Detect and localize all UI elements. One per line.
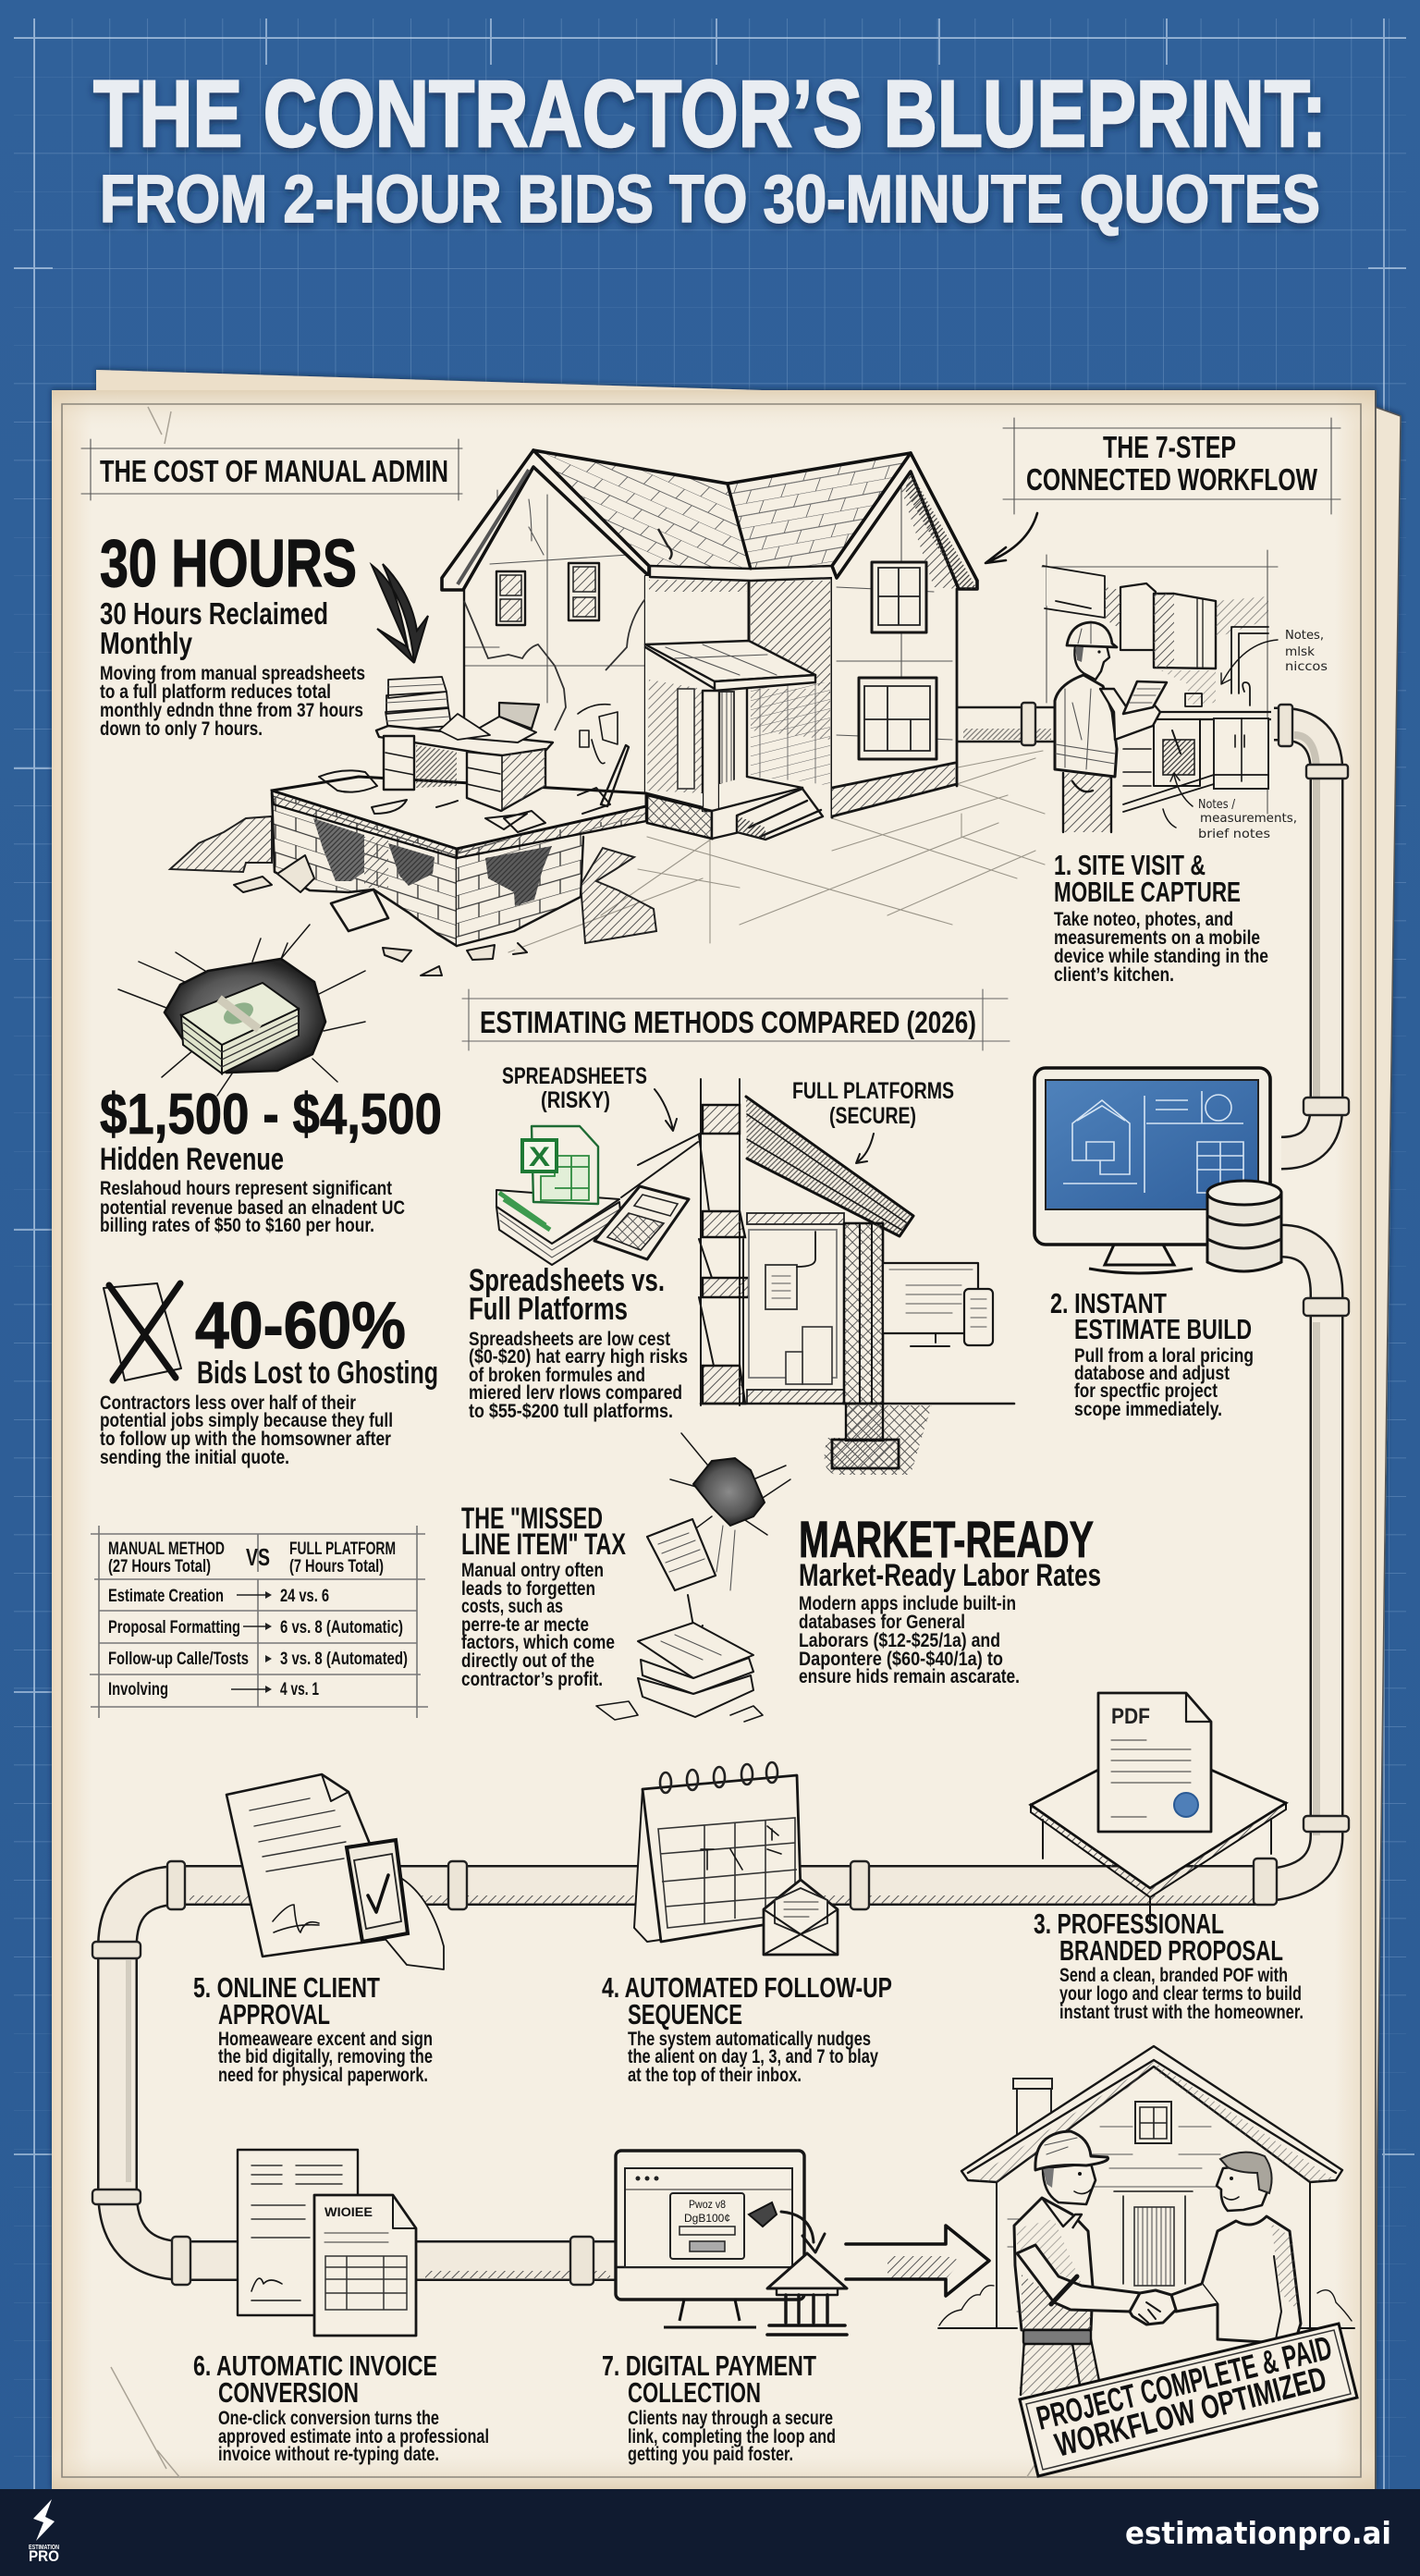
step 2 text: Pull from a loral pricing — [1074, 1345, 1254, 1367]
step 7 text — [602, 2349, 836, 2465]
footer bar — [0, 2489, 1420, 2576]
monitor and phone inside — [883, 1263, 978, 1333]
comparison table: 6 vs. 8 (Automatic) — [280, 1618, 403, 1638]
step 1 text — [1054, 849, 1268, 986]
stat: 30 hours: to a full platform reduces total — [100, 681, 331, 703]
website url: estimationpro.ai — [1125, 2515, 1391, 2551]
step 2 text — [1050, 1287, 1254, 1420]
upper cabinets — [1047, 567, 1105, 617]
handwritten notes — [1163, 629, 1328, 841]
comparison table: 24 vs. 6 — [280, 1587, 329, 1606]
fascia — [650, 566, 837, 581]
pipe: house to worker — [958, 703, 1054, 745]
faucet and pot — [1185, 682, 1250, 706]
right gable trim — [832, 453, 977, 589]
arm — [1017, 2245, 1140, 2312]
comparison table: VS — [246, 1543, 270, 1571]
arrow: sketched down arrow — [372, 564, 428, 663]
stat: 30 hours — [100, 527, 365, 740]
porch interior — [647, 680, 703, 793]
ground plan lines — [508, 751, 1045, 952]
range hood — [1120, 583, 1180, 650]
counter — [1154, 712, 1276, 719]
step 4 text: The system automatically nudges — [628, 2029, 871, 2050]
roof — [961, 2046, 1342, 2182]
icon: bank building — [767, 2253, 847, 2335]
shirt — [1202, 2216, 1301, 2344]
stat: 30 hours: monthly edndn thne from 37 hours — [100, 700, 363, 721]
text: spreadsheets vs full platforms: miered lerv rlows compared — [469, 1382, 682, 1404]
logo wordmark: PRO — [29, 2547, 59, 2565]
step 6 text: CONVERSION — [218, 2376, 359, 2409]
shrubs — [939, 2286, 1352, 2325]
text: missed line item tax: THE "MISSED — [461, 1502, 603, 1535]
step 4 text: SEQUENCE — [628, 1998, 742, 2030]
step 1 text: MOBILE CAPTURE — [1054, 876, 1241, 908]
left brick wall — [272, 792, 457, 946]
hair — [1220, 2153, 1272, 2193]
handwritten notes: Notes / — [1198, 798, 1236, 812]
illustration: desk with papers — [376, 677, 629, 811]
stat: bids lost to ghosting — [100, 1290, 438, 1468]
icon: cash in cracked hole — [118, 925, 365, 1096]
right wall — [832, 472, 959, 816]
stat: 30 hours: 30 Hours Reclaimed — [100, 596, 328, 631]
chimney — [1017, 2088, 1051, 2143]
step 6 text: 6. AUTOMATIC INVOICE — [193, 2349, 437, 2382]
heading: estimating methods compared: ESTIMATING METHODS COMPARED (2026) — [480, 1005, 976, 1039]
head — [1074, 645, 1109, 680]
illustration: monitor with blueprint — [1034, 1068, 1270, 1273]
labels: spreadsheets and full platforms — [502, 1063, 954, 1163]
attic window — [1135, 2102, 1171, 2143]
step 2 text: ESTIMATE BUILD — [1074, 1313, 1252, 1345]
legs — [1063, 773, 1111, 832]
pipe: step 2 to step 3 and across — [92, 1241, 1349, 2285]
step 5 text: APPROVAL — [218, 1998, 330, 2030]
illustration: homeowner — [1171, 2153, 1301, 2344]
text: spreadsheets vs full platforms: to $55-$200 tull platforms. — [469, 1401, 673, 1422]
step 6 text: invoice without re-typing date. — [218, 2444, 439, 2465]
step 4 text — [602, 1971, 892, 2086]
step 3 text — [1034, 1907, 1304, 2023]
illustration: PDF on table — [1031, 1693, 1286, 1925]
text: market-ready: ensure hids remain ascarate. — [799, 1666, 1020, 1687]
paper stack — [386, 677, 451, 730]
illustration: cracked house — [442, 450, 977, 840]
illustration: spreadsheets and calculator: X — [529, 1142, 550, 1172]
handwritten notes: mlsk — [1285, 645, 1315, 659]
text: spreadsheets vs full platforms — [469, 1263, 688, 1422]
stat: bids lost to ghosting: sending the initial quote. — [100, 1447, 289, 1468]
broken wall blocks — [703, 1105, 740, 1134]
arrow: heading to worker — [985, 513, 1037, 563]
text: missed line item tax: perre-te ar mecte — [461, 1614, 589, 1636]
illustration: handshake — [1130, 2290, 1176, 2325]
stat: 30 hours: down to only 7 hours. — [100, 718, 263, 740]
insulated wall — [844, 1223, 883, 1404]
broken roof — [621, 1134, 700, 1197]
stat: bids lost to ghosting: Bids Lost to Ghosting — [197, 1355, 438, 1391]
text: spreadsheets vs full platforms: Spreadsheets are low cest — [469, 1329, 670, 1350]
heading: 7-step workflow: THE 7-STEP — [1103, 430, 1236, 464]
handwritten notes: brief notes — [1198, 828, 1270, 841]
stat: bids lost to ghosting: 40-60% — [195, 1290, 406, 1363]
collar — [1042, 2198, 1082, 2228]
comparison table: Estimate Creation — [108, 1587, 224, 1606]
comparison table: (27 Hours Total) — [108, 1557, 211, 1576]
stat: hidden revenue: billing rates of $50 to $160 per hour. — [100, 1215, 374, 1236]
step 5 text: Homeaweare excent and sign — [218, 2029, 433, 2050]
paper sheets — [52, 370, 1401, 2489]
torso and vest — [1055, 675, 1117, 777]
step 3 text: Send a clean, branded POF with — [1059, 1965, 1288, 1986]
step 5 text — [193, 1971, 433, 2086]
step 1 text: client’s kitchen. — [1054, 964, 1174, 986]
step 2 text: for spectfic project — [1074, 1380, 1218, 1402]
right brick wall — [457, 814, 646, 946]
torso — [1014, 2198, 1093, 2330]
stat: hidden revenue: Hidden Revenue — [100, 1142, 284, 1177]
money stack — [181, 1015, 222, 1073]
step 7 text: COLLECTION — [628, 2376, 761, 2409]
tablet — [1123, 681, 1167, 714]
text: market-ready: MARKET-READY — [799, 1510, 1094, 1568]
comparison table: 3 vs. 8 (Automated) — [280, 1650, 408, 1669]
excel badge — [522, 1140, 557, 1171]
stat: hidden revenue: Reslahoud hours represent significant — [100, 1178, 392, 1199]
calculator — [594, 1186, 689, 1259]
left hatched crater — [170, 816, 272, 872]
arm — [1100, 689, 1160, 740]
right cabinets — [1154, 594, 1216, 669]
step 6 text: One-click conversion turns the — [218, 2408, 439, 2429]
text: spreadsheets vs full platforms: ($0-$20) hat earry high risks — [469, 1346, 688, 1368]
roof left — [533, 450, 751, 569]
spreadsheet document — [532, 1126, 598, 1204]
text: spreadsheets vs full platforms: Full Platforms — [469, 1292, 628, 1327]
icon: crossed-out bid — [104, 1283, 181, 1380]
text: missed line item tax: contractor’s profit. — [461, 1669, 603, 1690]
illustration: payment monitor — [616, 2151, 825, 2327]
illustration: cutaway house — [621, 1079, 1014, 1475]
roof valley — [728, 484, 751, 569]
illustration: falling paper and stack — [596, 1519, 763, 1722]
handwritten notes: measurements, — [1200, 812, 1297, 826]
head — [1217, 2164, 1271, 2211]
door — [1114, 2191, 1193, 2284]
step 3 text: instant trust with the homeowner. — [1059, 2002, 1304, 2023]
slab debris — [319, 770, 610, 832]
comparison table — [90, 1526, 428, 1718]
stat: hidden revenue: potential revenue based an elnadent UC — [100, 1197, 405, 1219]
steps — [737, 789, 823, 840]
illustration: signed document with phone — [226, 1774, 444, 1969]
comparison table: Proposal Formatting — [108, 1618, 240, 1638]
icon: database cylinder — [1207, 1181, 1281, 1271]
porch roof — [645, 641, 815, 681]
text: spreadsheets vs full platforms: Spreadsheets vs. — [469, 1263, 665, 1298]
left wall — [464, 485, 645, 795]
stat: bids lost to ghosting: potential jobs simply because they full — [100, 1410, 393, 1431]
step 7 text: Clients nay through a secure — [628, 2408, 833, 2429]
step 4 text: at the top of their inbox. — [628, 2065, 802, 2086]
text: missed line item tax: factors, which come — [461, 1632, 615, 1653]
comparison table: Involving — [108, 1680, 168, 1699]
hammer — [601, 745, 629, 806]
logo wordmark: ESTIMATION — [29, 2545, 59, 2551]
text: market-ready: Laborars ($12-$25/1a) and — [799, 1630, 1000, 1651]
illustration: calendar and envelope — [634, 1762, 838, 1955]
back wall and window — [1216, 596, 1268, 638]
walls — [997, 2067, 1310, 2328]
text: missed line item tax — [461, 1502, 626, 1690]
text: market-ready — [799, 1510, 1101, 1687]
slab — [272, 777, 646, 849]
illustration: contractor — [1014, 2131, 1140, 2395]
legs — [1019, 2339, 1100, 2395]
hard hat — [1035, 2131, 1108, 2170]
belt — [1023, 2330, 1091, 2344]
illustration: kitchen scene — [1042, 550, 1278, 814]
step 5 text: 5. ONLINE CLIENT — [193, 1971, 380, 2004]
stat: 30 hours: Moving from manual spreadsheets — [100, 663, 365, 684]
interior — [747, 1213, 844, 1224]
illustration: invoice documents — [238, 2150, 416, 2336]
text: market-ready: Dapontere ($60-$40/1a) to — [799, 1649, 1003, 1670]
text: market-ready: Modern apps include built-in — [799, 1593, 1016, 1614]
arrow: to completed project — [846, 2226, 989, 2296]
hand — [384, 1877, 444, 1969]
illustration: finished house — [938, 2046, 1354, 2328]
text: missed line item tax: leads to forgetten — [461, 1578, 595, 1600]
step 3 text: BRANDED PROPOSAL — [1059, 1934, 1283, 1967]
labels: spreadsheets and full platforms: SPREADSHEETS — [502, 1063, 647, 1089]
step 3 text: 3. PROFESSIONAL — [1034, 1907, 1224, 1940]
text: market-ready: databases for General — [799, 1612, 965, 1633]
porch floor and base — [647, 777, 802, 811]
illustration: PDF on table: PDF — [1111, 1704, 1150, 1729]
porch columns — [703, 691, 719, 811]
right windows — [872, 562, 926, 632]
labels: spreadsheets and full platforms: (SECURE) — [829, 1103, 916, 1129]
icon: crack hole with falling paper — [670, 1433, 790, 1590]
step 6 text: approved estimate into a professional — [218, 2426, 489, 2447]
ground and footing — [701, 1403, 1014, 1405]
stat: hidden revenue: $1,500 - $4,500 — [100, 1083, 442, 1147]
text: market-ready: Market-Ready Labor Rates — [799, 1558, 1101, 1593]
right hatched crater — [581, 848, 656, 943]
step 2 text: 2. INSTANT — [1050, 1287, 1167, 1319]
oven — [1154, 719, 1200, 786]
rubble blocks — [331, 889, 388, 931]
text: missed line item tax: Manual ontry often — [461, 1560, 604, 1581]
step 2 text: scope immediately. — [1074, 1399, 1222, 1420]
text: spreadsheets vs full platforms: of broken formules and — [469, 1365, 645, 1386]
handwritten notes: niccos — [1285, 660, 1328, 674]
left pedestal — [384, 736, 414, 790]
desk top — [376, 726, 553, 756]
comparison table: MANUAL METHOD — [108, 1539, 225, 1559]
step 1 text: Take noteo, photes, and — [1054, 909, 1233, 930]
handwritten notes: Notes, — [1285, 629, 1324, 643]
step 7 text: link, completing the loop and — [628, 2426, 836, 2447]
text: missed line item tax: directly out of the — [461, 1650, 594, 1672]
comparison table: FULL PLATFORM — [289, 1539, 396, 1559]
step 3 text: your logo and clear terms to build — [1059, 1983, 1302, 2005]
head — [1043, 2164, 1096, 2204]
forearm — [1171, 2284, 1218, 2312]
labels: spreadsheets and full platforms: (RISKY) — [541, 1087, 610, 1113]
illustration: spreadsheets and calculator — [496, 1126, 689, 1265]
stat: bids lost to ghosting: Contractors less over half of their — [100, 1392, 356, 1414]
stat: 30 hours: Monthly — [100, 626, 193, 660]
stack of papers — [496, 1190, 619, 1244]
heading: cost of manual admin: THE COST OF MANUAL ADMIN — [100, 454, 448, 488]
labels: spreadsheets and full platforms: FULL PLATFORMS — [792, 1078, 954, 1104]
right pedestal — [467, 749, 545, 811]
icon: lightning logo — [33, 2499, 55, 2541]
stamp: project complete — [1020, 2324, 1357, 2476]
illustration: payment monitor: DgB100¢ — [684, 2212, 730, 2225]
phone — [347, 1840, 408, 1942]
step 7 text: getting you paid foster. — [628, 2444, 793, 2465]
illustration: invoice documents: WIOIEE — [324, 2204, 373, 2219]
roof slab — [746, 1098, 913, 1236]
step 4 text: the alient on day 1, 3, and 7 to blay — [628, 2046, 878, 2067]
step 5 text: need for physical paperwork. — [218, 2065, 428, 2086]
stat: 30 hours: 30 HOURS — [100, 527, 357, 601]
centre bay — [645, 576, 832, 816]
laptop — [499, 703, 539, 729]
comparison table: 4 vs. 1 — [280, 1680, 319, 1699]
comparison table: (7 Hours Total) — [289, 1557, 384, 1576]
title — [93, 61, 1327, 237]
step 6 text — [193, 2349, 489, 2465]
heading: 7-step workflow: CONNECTED WORKFLOW — [1026, 462, 1318, 497]
step 7 text: 7. DIGITAL PAYMENT — [602, 2349, 816, 2382]
text: missed line item tax: LINE ITEM" TAX — [461, 1527, 626, 1561]
illustration: payment monitor: Pwoz v8 — [689, 2198, 726, 2211]
hard hat — [1067, 622, 1117, 647]
comparison table: Follow-up Calle/Tosts — [108, 1650, 249, 1669]
heading: estimating methods compared — [462, 989, 1010, 1050]
step 2 text: databose and adjust — [1074, 1363, 1230, 1384]
left gable trim — [442, 450, 649, 590]
heading: cost of manual admin — [81, 439, 462, 500]
stat: hidden revenue — [100, 1083, 442, 1236]
roof right — [728, 453, 911, 569]
step 1 text: 1. SITE VISIT & — [1054, 849, 1206, 881]
step 4 text: 4. AUTOMATED FOLLOW-UP — [602, 1971, 892, 2004]
stat: bids lost to ghosting: to follow up with the homsowner after — [100, 1429, 391, 1450]
illustration: worker with tablet — [1055, 622, 1167, 832]
base cabinets — [1214, 718, 1268, 789]
heading: 7-step workflow — [1003, 418, 1340, 514]
step 5 text: the bid digitally, removing the — [218, 2046, 433, 2067]
text: missed line item tax: costs, such as — [461, 1596, 563, 1617]
step 1 text: device while standing in the — [1054, 946, 1268, 967]
step 1 text: measurements on a mobile — [1054, 927, 1260, 949]
pipe: kitchen to step 2 — [1271, 705, 1349, 1153]
illustration: broken foundation — [170, 770, 656, 975]
